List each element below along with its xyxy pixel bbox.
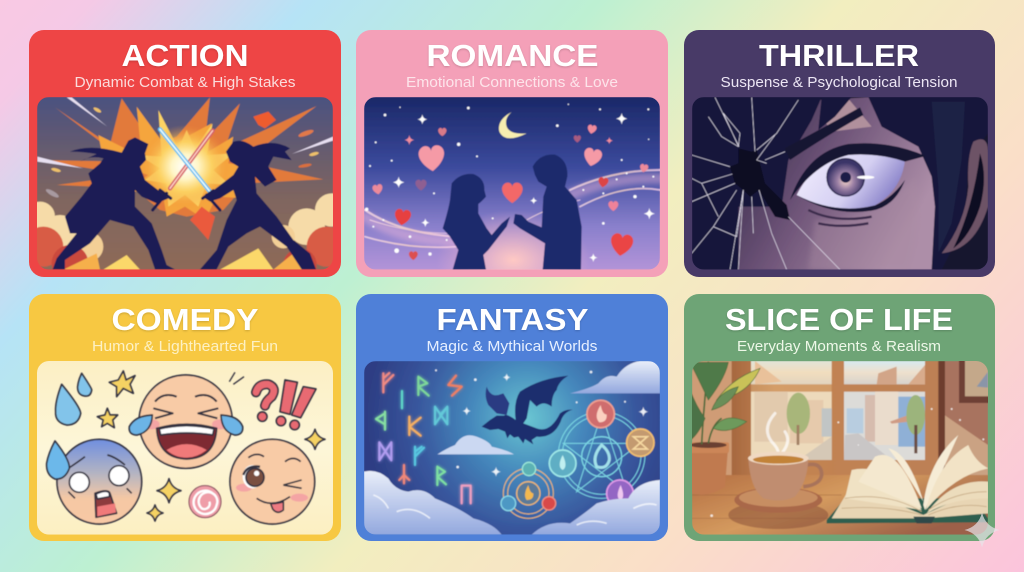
thriller subtitle: Suspense & Psychological Tension bbox=[720, 75, 958, 91]
romance heading: ROMANCE bbox=[426, 38, 598, 73]
silhouette: man bbox=[513, 155, 582, 270]
action heading: ACTION bbox=[122, 38, 248, 73]
left cloud bbox=[37, 200, 140, 270]
sparkle stars bbox=[393, 113, 655, 262]
glass hole bbox=[730, 148, 790, 220]
plant leaves bbox=[688, 362, 760, 444]
fantasy card background bbox=[356, 294, 668, 541]
romance card background bbox=[356, 30, 668, 277]
picture frame bbox=[959, 359, 992, 403]
comedy card background bbox=[29, 294, 341, 541]
question exclamation marks bbox=[256, 380, 316, 430]
illustration: dragon, runes and magic circles bbox=[364, 361, 660, 535]
slice of life heading: SLICE OF LIFE bbox=[725, 302, 953, 337]
illustration: couple under moon bbox=[364, 97, 660, 270]
face skin bbox=[738, 97, 935, 270]
window views bbox=[751, 361, 832, 384]
right cloud bbox=[220, 192, 333, 270]
top right cloud bbox=[570, 361, 660, 393]
spiral bbox=[189, 486, 221, 518]
stars bbox=[109, 371, 135, 397]
window frame bbox=[732, 361, 945, 476]
eyelids bbox=[790, 143, 926, 200]
floating hearts bbox=[372, 124, 649, 260]
right wall bbox=[942, 361, 988, 476]
small magic circle bbox=[503, 468, 553, 518]
ear bbox=[942, 139, 988, 253]
wisp glow bands bbox=[365, 178, 660, 242]
comedy subtitle: Humor & Lighthearted Fun bbox=[92, 339, 278, 355]
action card background bbox=[29, 30, 341, 277]
dragon bbox=[482, 376, 573, 444]
illustration: emoji faces bbox=[37, 361, 333, 535]
neon runes bbox=[376, 373, 471, 503]
small stars bbox=[435, 369, 648, 477]
bottom left clouds bbox=[364, 471, 502, 535]
plant pot bbox=[690, 444, 728, 495]
romance subtitle: Emotional Connections & Love bbox=[406, 75, 618, 91]
center laughing face bbox=[129, 375, 243, 468]
shocked blue face bbox=[47, 439, 142, 524]
panel: romance bbox=[356, 30, 668, 277]
fantasy subtitle: Magic & Mythical Worlds bbox=[426, 339, 598, 355]
element emblems bbox=[549, 400, 654, 507]
panel: slice of life bbox=[684, 294, 1000, 548]
fantasy heading: FANTASY bbox=[436, 302, 589, 337]
steam bbox=[767, 413, 788, 453]
panel: thriller bbox=[684, 30, 995, 277]
illustration: shattered glass and staring eye bbox=[692, 97, 988, 270]
illustration: sword duel silhouettes bbox=[37, 97, 333, 270]
open book bbox=[827, 435, 988, 523]
brow stroke bbox=[785, 107, 863, 160]
dust sparkles bbox=[710, 408, 984, 517]
iris bbox=[827, 159, 864, 196]
swords bbox=[153, 129, 220, 210]
large magic circle bbox=[558, 412, 645, 498]
panel: action bbox=[23, 30, 348, 282]
silhouette: female fighter bbox=[200, 141, 316, 269]
thriller heading: THRILLER bbox=[759, 38, 919, 73]
action subtitle: Dynamic Combat & High Stakes bbox=[74, 75, 296, 91]
wall sunlight bbox=[751, 361, 832, 460]
table bbox=[692, 475, 988, 535]
silhouette: woman bbox=[443, 174, 510, 270]
panel: comedy bbox=[29, 294, 341, 541]
hair bbox=[692, 97, 988, 270]
saucer bbox=[734, 487, 822, 513]
street buildings bbox=[755, 361, 782, 384]
sparkling wisps bbox=[365, 170, 660, 247]
silhouette: male fighter bbox=[53, 137, 175, 269]
drops bbox=[56, 384, 81, 425]
crescent moon bbox=[499, 112, 527, 138]
slice of life subtitle: Everyday Moments & Realism bbox=[737, 339, 941, 355]
bottom right clouds bbox=[532, 480, 660, 535]
comedy heading: COMEDY bbox=[112, 302, 259, 337]
watermark sparkle bbox=[964, 512, 1000, 548]
glass cracks bbox=[692, 97, 840, 270]
lower sparkles bbox=[147, 429, 325, 521]
illustration: coffee and book by a window bbox=[688, 359, 992, 535]
coffee cup bbox=[803, 464, 822, 487]
slice of life card background bbox=[684, 294, 995, 541]
middle cloud bbox=[437, 435, 514, 454]
winking face bbox=[230, 439, 315, 524]
eye bbox=[797, 153, 905, 209]
panel: fantasy bbox=[356, 294, 668, 541]
thriller card background bbox=[684, 30, 995, 277]
